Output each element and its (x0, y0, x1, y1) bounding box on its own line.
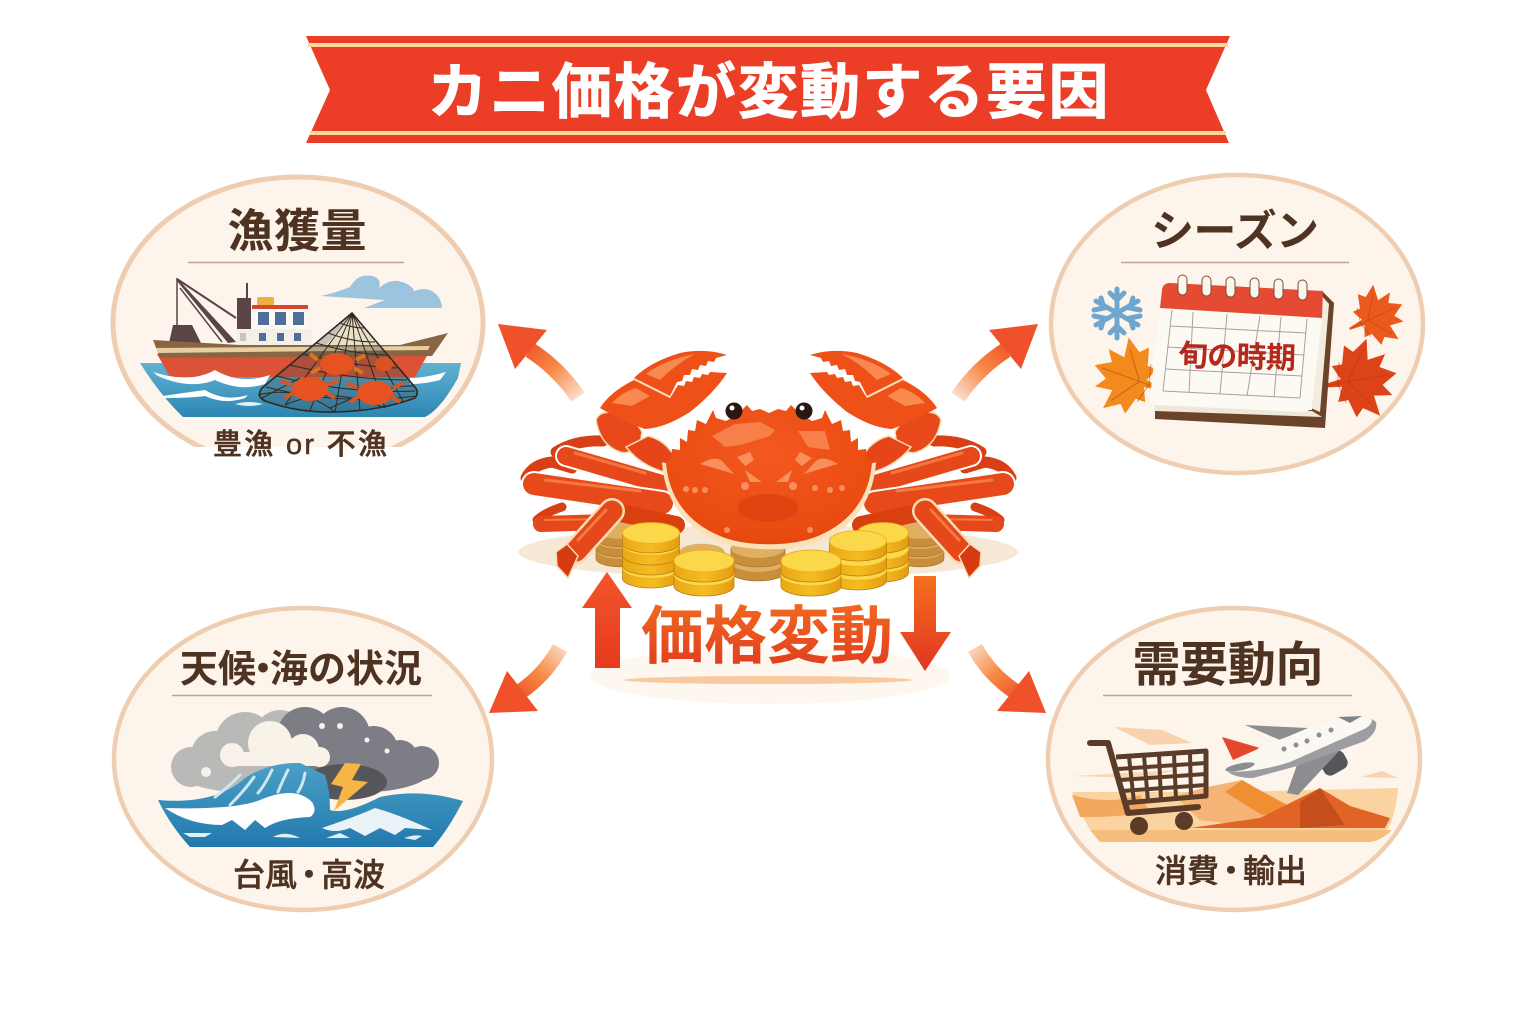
icon: up arrow (582, 572, 632, 668)
icon: orange maple leaf (1082, 330, 1176, 425)
heading: シーズン: シーズン (1151, 208, 1319, 256)
icon: down arrow (900, 576, 951, 671)
caption: 豊漁 or 不漁: 豊漁 or 不漁 (213, 428, 387, 461)
heading: 漁獲量: 漁獲量 (228, 205, 366, 257)
icon: red maple leaf top (1337, 277, 1415, 356)
panel: 天候・海の状況 (114, 608, 492, 910)
icon: snowflake (1094, 289, 1140, 338)
arrow: center to top-right panel (958, 324, 1038, 397)
crab carapace (662, 405, 876, 549)
heading: 需要動向: 需要動向 (1132, 639, 1324, 692)
crab front legs (556, 510, 981, 578)
panel: 需要動向 (1048, 608, 1420, 910)
calendar label: 旬の時期: 旬の時期 (1178, 339, 1296, 376)
crab eyes (726, 402, 812, 420)
icon: shopping cart (1090, 743, 1206, 835)
icon: lightning bolt (331, 763, 368, 811)
caption: 台風・高波: 台風・高波 (233, 857, 385, 893)
coin stacks back (596, 521, 944, 581)
arrow: center to bottom-right panel (975, 648, 1046, 713)
heading: 天候・海の状況: 天候・海の状況 (180, 649, 422, 691)
arrow: center to top-left panel (498, 324, 578, 397)
coin stacks front (622, 523, 908, 596)
crab legs and claws (526, 351, 1011, 525)
icon: crabs in net (258, 313, 417, 412)
arrow: center to bottom-left panel (489, 648, 560, 713)
icon: red maple leaf right (1315, 335, 1403, 425)
caption: 消費・輸出: 消費・輸出 (1155, 853, 1307, 889)
icon: storm clouds (171, 707, 439, 800)
icon: airplane (1222, 716, 1376, 795)
icon: fishing boat (153, 278, 448, 377)
title text: カニ価格が変動する要因 (428, 59, 1108, 126)
icon: sea waves (158, 763, 463, 847)
icon: wave foam (153, 370, 446, 406)
center label glow (590, 648, 950, 704)
panel: 漁獲量 (113, 177, 483, 475)
center illustration: crab on coins (518, 351, 1018, 596)
icon: calendar (1150, 275, 1334, 428)
icon: desert landscape (1072, 727, 1398, 842)
center text: 価格変動: 価格変動 (641, 602, 893, 672)
panel: シーズン (1051, 175, 1423, 473)
title banner (306, 36, 1230, 143)
icon: sea (140, 363, 461, 417)
icon: cloud (321, 275, 442, 308)
subtitle white gap (185, 428, 415, 475)
